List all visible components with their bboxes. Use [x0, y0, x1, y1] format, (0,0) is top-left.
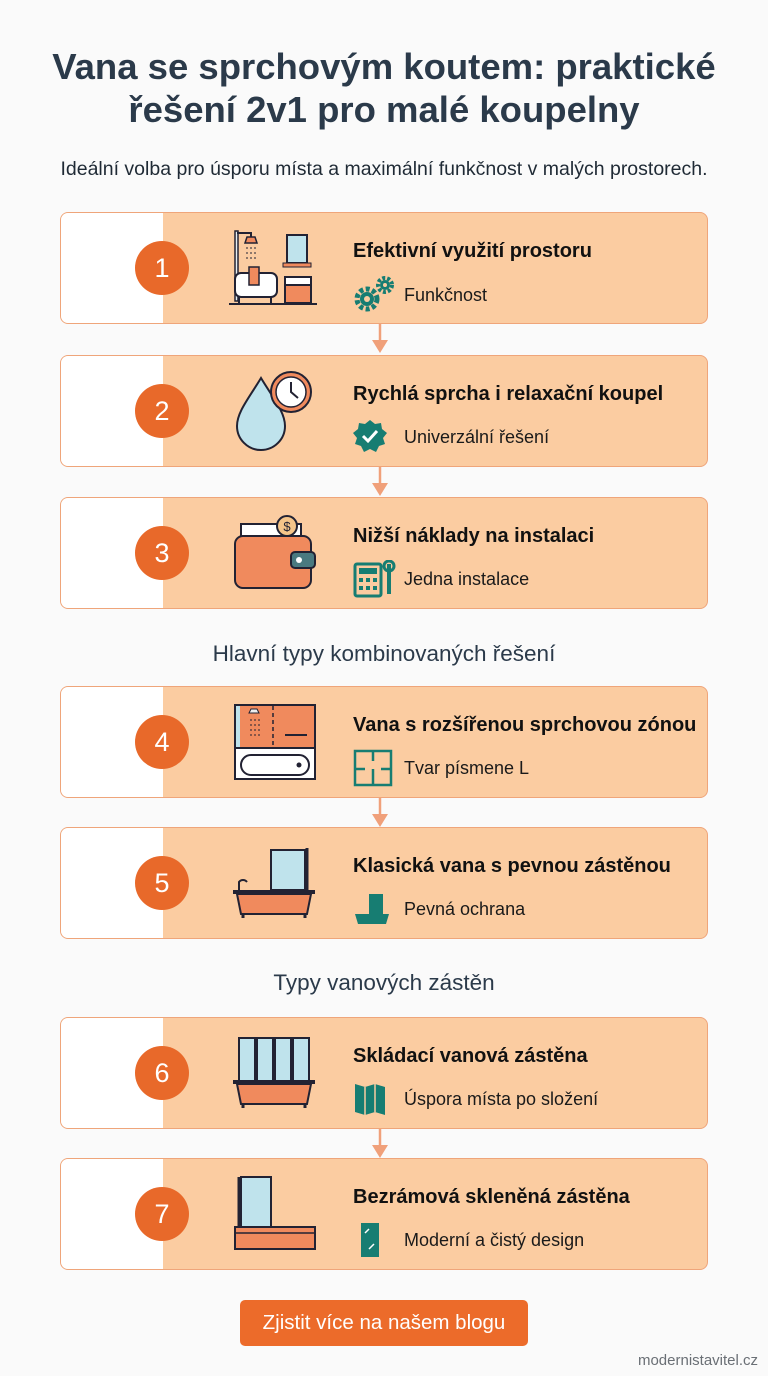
subtext 6: Úspora místa po složení: [404, 1089, 598, 1109]
section heading: screen types: Typy vanových zástěn: [273, 970, 495, 995]
number 7: 7: [154, 1199, 170, 1229]
icon: bathroom: [229, 230, 317, 305]
footer: modernistavitel.cz: [638, 1352, 758, 1369]
icon: folding screen: [233, 1037, 315, 1108]
title: řešení 2v1 pro malé koupelny: [128, 89, 640, 130]
icon: floor plan: [354, 750, 392, 786]
card 6: [60, 1017, 708, 1129]
subtext 5: Pevná ochrana: [404, 899, 525, 919]
heading 6: Skládací vanová zástěna: [353, 1045, 588, 1067]
heading 5: Klasická vana s pevnou zástěnou: [353, 855, 671, 877]
number 3: 3: [154, 538, 170, 568]
card 7: [60, 1158, 708, 1270]
number 4: 4: [154, 727, 170, 757]
icon: small tub: [355, 894, 389, 924]
icon: drop & clock: [236, 371, 312, 451]
CTA button: Zjistit více na našem blogu: [263, 1311, 505, 1334]
heading 3: Nižší náklady na instalaci: [353, 525, 594, 547]
icon: tub with shower zone: [234, 704, 316, 780]
icon: glass panel: [361, 1223, 379, 1257]
number 6: 6: [154, 1058, 170, 1088]
subtext 3: Jedna instalace: [404, 569, 529, 589]
title: Vana se sprchovým koutem: praktické: [52, 46, 716, 87]
number 2: 2: [154, 396, 170, 426]
icon: check badge: [353, 420, 387, 452]
arrow: [372, 467, 388, 496]
arrow: [372, 1129, 388, 1158]
number 6: [135, 1046, 189, 1100]
card 1: [60, 212, 708, 324]
number 5: 5: [154, 868, 170, 898]
number 5: [135, 856, 189, 910]
heading 4: Vana s rozšířenou sprchovou zónou: [353, 714, 696, 736]
card 3: [60, 497, 708, 609]
card 2: [60, 355, 708, 467]
number 2: [135, 384, 189, 438]
number 1: 1: [154, 253, 170, 283]
subtext 7: Moderní a čistý design: [404, 1230, 584, 1250]
icon: tub with fixed screen: [233, 848, 315, 918]
subtext 4: Tvar písmene L: [404, 758, 529, 778]
number 1: [135, 241, 189, 295]
heading 7: Bezrámová skleněná zástěna: [353, 1186, 630, 1208]
card 5: [60, 827, 708, 939]
number 3: [135, 526, 189, 580]
icon: gears: [354, 276, 394, 312]
arrow: [372, 798, 388, 827]
arrow: [372, 324, 388, 353]
heading 2: Rychlá sprcha i relaxační koupel: [353, 383, 663, 405]
icon: folded map: [355, 1084, 385, 1115]
title: [52, 46, 716, 130]
subtext 2: Univerzální řešení: [404, 427, 549, 447]
icon: calculator & wrench: [354, 560, 396, 598]
icon: wallet: [234, 515, 316, 589]
icon: wallet: $: [283, 519, 291, 534]
subtitle: Ideální volba pro úsporu místa a maximální funkčnost v malých prostorech.: [60, 158, 708, 180]
CTA button: [240, 1300, 528, 1346]
number 4: [135, 715, 189, 769]
subtext 1: Funkčnost: [404, 285, 487, 305]
card 4: [60, 686, 708, 798]
number 7: [135, 1187, 189, 1241]
section heading: main types: Hlavní typy kombinovaných řešení: [213, 641, 555, 666]
icon: frameless glass: [234, 1176, 316, 1250]
heading 1: Efektivní využití prostoru: [353, 240, 592, 262]
